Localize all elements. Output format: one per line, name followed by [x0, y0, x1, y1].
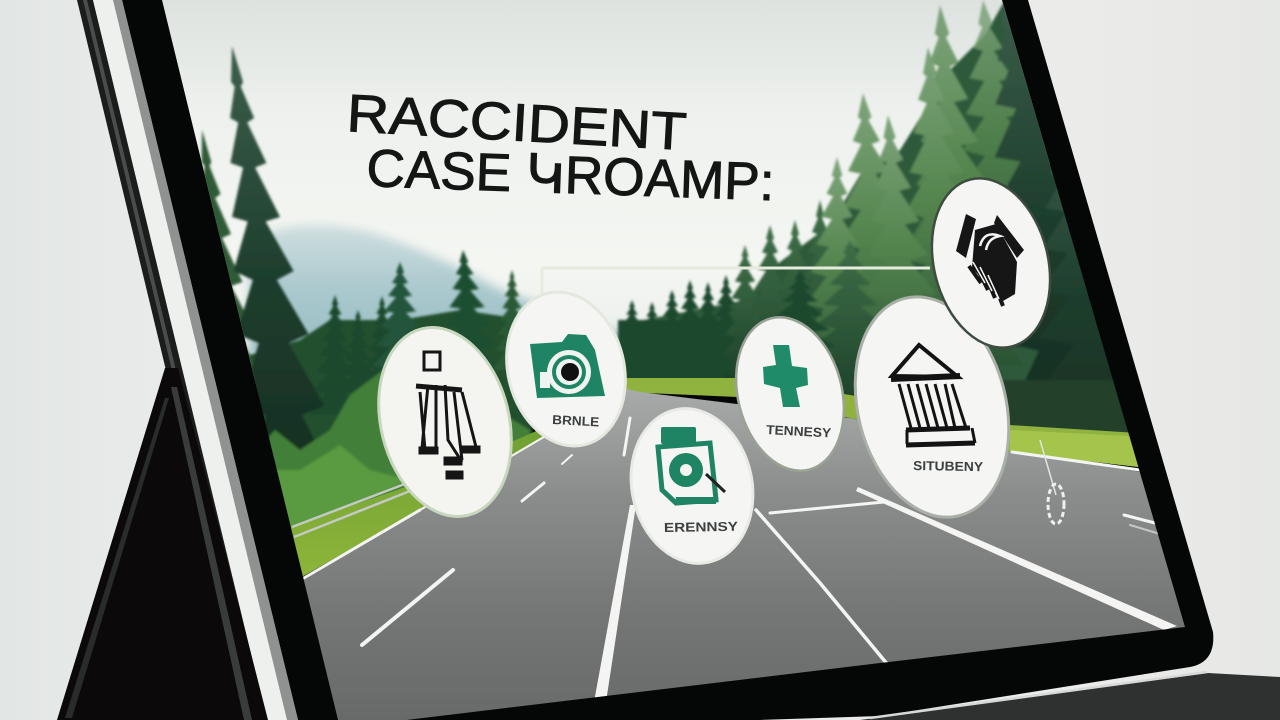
forest right [616, 0, 1130, 436]
sky [150, 0, 1050, 380]
grass left [290, 431, 542, 576]
tablet stand [57, 368, 268, 720]
guard rail [292, 482, 410, 537]
road markings [304, 392, 1160, 665]
title [345, 84, 775, 212]
label: courthouse: SITUBENY [913, 458, 984, 474]
grass right [626, 378, 1138, 467]
label: camera: BRNLE [552, 412, 600, 429]
label: medical: TENNESY [766, 422, 832, 440]
panel: camera [491, 279, 641, 459]
label: document: ERENNSY [664, 519, 738, 535]
forest left [200, 46, 534, 554]
title: RACCIDENT [345, 84, 688, 162]
connector line [542, 268, 930, 295]
icon: small road glyph [1048, 484, 1064, 524]
distant hill [250, 225, 640, 390]
icon: document with lens [658, 427, 725, 504]
icon: medical cross [763, 345, 808, 407]
icon: handshake [956, 214, 1024, 306]
panel: medical [721, 306, 859, 482]
panel: scales of justice [360, 313, 530, 531]
road [300, 388, 1260, 720]
icon: scales [416, 352, 479, 478]
panel: courthouse [833, 280, 1031, 534]
panel: handshake [915, 166, 1067, 360]
icon: courthouse [891, 345, 975, 445]
panel: document [617, 397, 767, 575]
icon: camera [530, 334, 605, 398]
keyboard base [860, 673, 1280, 720]
title: CASE ԿROAMP: [366, 139, 775, 212]
